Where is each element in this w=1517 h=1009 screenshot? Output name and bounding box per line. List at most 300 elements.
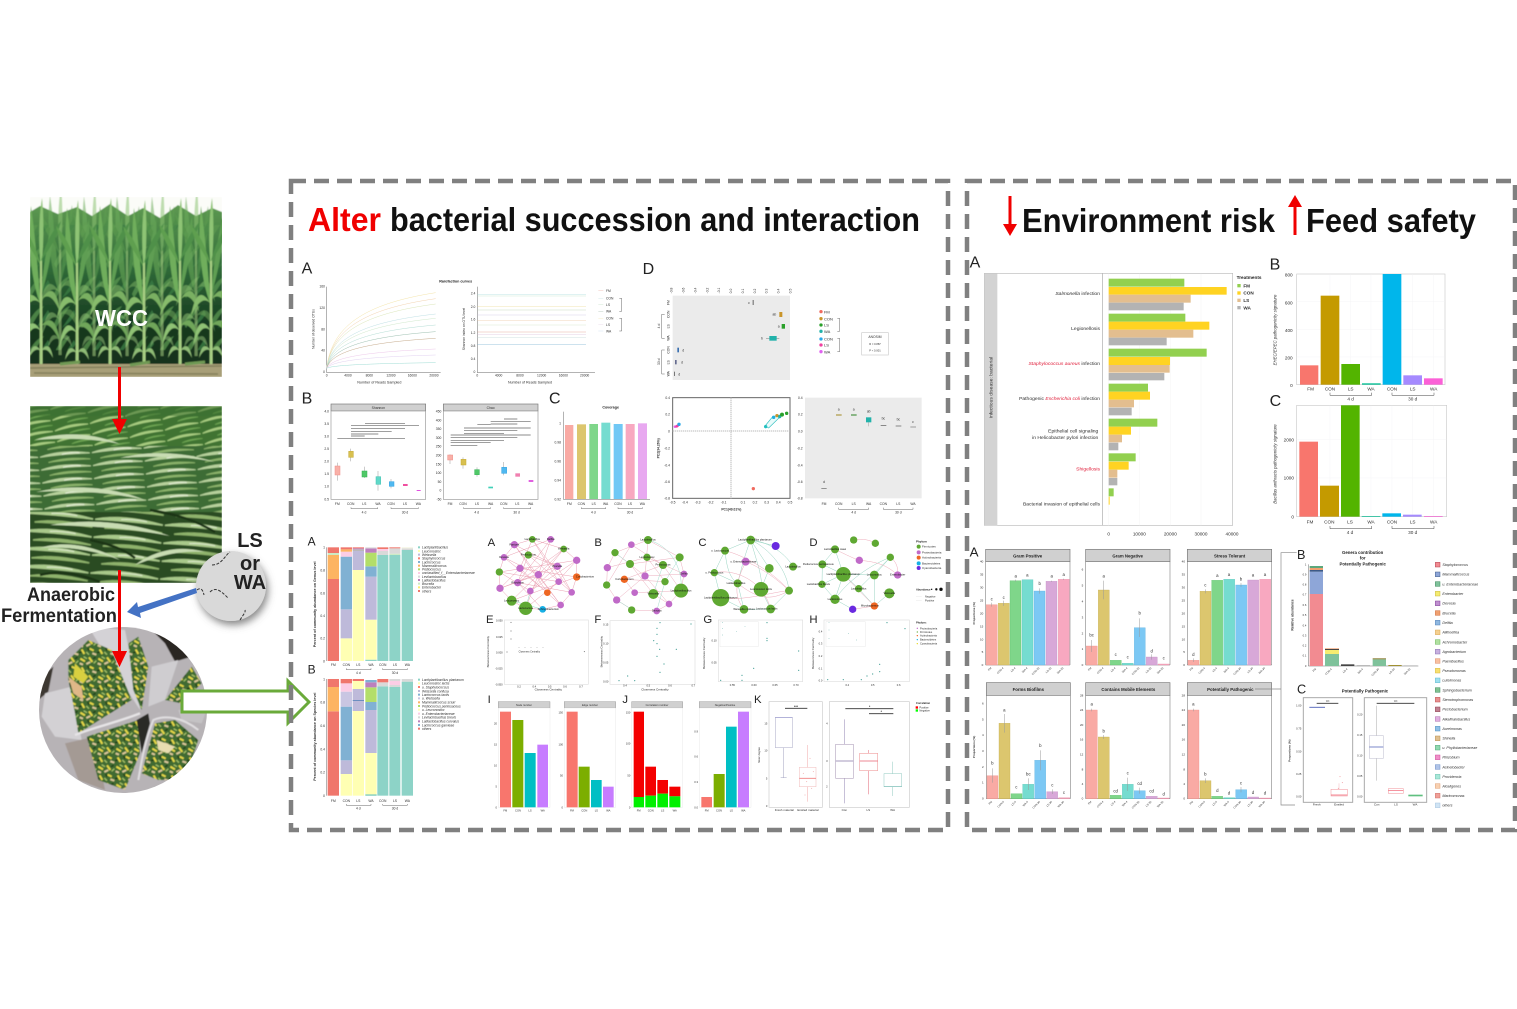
chart: rarefaction curves Shannon: 12000 <box>537 374 546 378</box>
chart: Node number bars <box>494 702 550 813</box>
chart: Potentially Pathogenic: LS-4 <box>1211 800 1218 807</box>
chart: Negative/Positive: 0.0 <box>694 805 699 809</box>
chart: centrality scatter H: 0.3 <box>819 642 823 646</box>
chart: infectious disease bars: 10000 <box>1133 531 1146 536</box>
chart: Correlation number: LS <box>661 809 665 813</box>
chart: PC1 boxplot horizontal: b <box>761 337 763 341</box>
chart: PC1 boxplot horizontal: 0.5 <box>788 289 792 293</box>
chart: centrality scatter H: 0.6 <box>897 683 901 687</box>
chart: PC1 boxplot horizontal <box>657 287 792 380</box>
title: up arrow <box>1288 195 1302 235</box>
chart: Stress Tolerant: 35 <box>1182 573 1185 577</box>
chart: PCoA scatter: -0.4 <box>664 463 670 467</box>
chart: rarefaction curves OTUs <box>311 285 441 385</box>
chart: centrality scatter G: 0.60 <box>751 683 757 687</box>
label: Anaerobic Fermentation: Fermentation <box>1 606 117 627</box>
chart: Potentially Pathogenic: CON-30 <box>1232 800 1242 810</box>
chart: Bacillus anthracis bars: CON <box>1324 520 1335 525</box>
chart: Gram Negative: d <box>1150 648 1153 653</box>
legend: species: Latilactobacillus curvatus <box>422 720 459 724</box>
chart: Mean degree fresh vs ensiled: Fresh material <box>775 808 794 812</box>
chart: Contains Mobile Elements: CON-30 <box>1131 800 1141 810</box>
chart: Stress Tolerant: LS-30 <box>1246 666 1254 674</box>
chart: stacked species level: LS <box>356 799 361 803</box>
chart: Forms Biofilms: Proportions (%) <box>972 736 976 758</box>
chart: EHEC/EPEC bars: EHEC/EPEC pathogenicity signature <box>1272 294 1277 365</box>
letter H: H <box>809 614 818 626</box>
chart: EHEC/EPEC bars <box>1272 273 1445 402</box>
chart: PCoA scatter <box>656 396 792 511</box>
chart: rarefaction curves OTUs: 40 <box>321 349 325 353</box>
chart: pathogenic Con LS WA box: 0.15 <box>1357 733 1363 737</box>
chart: PC1 boxplot horizontal: ab <box>772 313 776 317</box>
chart: PC1 boxplot horizontal: WA <box>666 335 670 341</box>
chart: stacked genus level: LS <box>356 663 361 667</box>
chart: Stress Tolerant: WA-4 <box>1223 666 1230 674</box>
chart: Gram Positive: 20 <box>980 611 984 615</box>
chart: Gram Positive: 5 <box>982 650 984 654</box>
letter C: C <box>549 390 561 407</box>
chart: Chao boxplot: CON <box>459 502 467 506</box>
panel: environment risk and feed safety <box>967 181 1515 830</box>
chart: Mean degree Con LS WA: * <box>881 710 883 714</box>
chart: Contains Mobile Elements: a <box>1090 702 1093 707</box>
legend: genera: others <box>1442 804 1453 808</box>
chart: PC1 boxplot horizontal: d <box>682 348 684 352</box>
chart: Negative/Positive: WA <box>741 809 746 813</box>
chart: PC2 boxplot: LS <box>852 502 856 506</box>
chart: stacked genus level: FM <box>331 663 336 667</box>
chart: Gram Negative: 3 <box>1082 615 1084 619</box>
chart: Shannon boxplot: FM <box>335 502 340 506</box>
chart: Contains Mobile Elements: WA-4 <box>1121 800 1129 807</box>
chart: PC1 boxplot horizontal: -0.1 <box>717 287 721 293</box>
chart: EHEC/EPEC bars: WA <box>1367 386 1376 391</box>
chart: network A: Pediococcus <box>521 553 537 557</box>
chart: Edge number bars: CON <box>581 809 587 813</box>
legend: genus <box>418 546 475 593</box>
chart: Bacillus anthracis bars: 0 <box>1291 514 1294 519</box>
chart: Forms Biofilms: 3 <box>982 749 984 753</box>
chart: PC1 boxplot horizontal: 0.1 <box>741 289 745 293</box>
chart: network A: Brucella <box>553 564 563 568</box>
chart: pathogenic Con LS WA box: 0.20 <box>1357 713 1363 717</box>
chart: PCoA scatter: -0.4 <box>682 500 688 504</box>
chart: Mean degree Con LS WA: LS <box>867 808 870 812</box>
legend: genera: Luteimonas <box>1442 679 1461 683</box>
chart: network D: Lactobacillus <box>851 586 867 590</box>
chart: centrality scatter H <box>811 620 909 687</box>
chart: PCoA scatter: 0.4 <box>665 396 670 400</box>
chart: Gram Negative: a <box>1102 573 1105 578</box>
chart: Potentially Pathogenic: d <box>1228 791 1231 796</box>
legend: rarefaction: LS <box>606 323 611 327</box>
left workflow column <box>1 187 309 796</box>
chart title: Potentially Pathogenic: Potentially Pathogenic <box>1342 689 1389 694</box>
chart: PCoA scatter: -0.1 <box>721 500 727 504</box>
chart: Stress Tolerant: 5 <box>1183 650 1185 654</box>
chart: stacked genus level: 30 d <box>392 671 398 675</box>
chart: PC1 boxplot horizontal: 0.0 <box>729 289 733 293</box>
chart: network A: Devosia <box>499 555 509 559</box>
chart: centrality scatter F: 0.6 <box>668 684 672 688</box>
chart: Chao boxplot: 150 <box>436 462 441 466</box>
chart: pathogenic Con LS WA box: Con <box>1374 803 1380 807</box>
chart: rarefaction curves Shannon: Number of Reads Sampled <box>508 381 552 385</box>
chart: stacked species level <box>313 677 413 810</box>
chart: Contains Mobile Elements: cd <box>1149 788 1155 793</box>
chart: Coverage bars: 4 d <box>591 511 596 515</box>
chart: infectious disease bars: in Helicobacter pylori infection <box>1032 435 1099 441</box>
chart: stacked genus level: 0.2 <box>320 637 325 641</box>
chart: genera stacked bars: WA-4 <box>1357 667 1364 675</box>
chart: Forms Biofilms: 2 <box>982 765 984 769</box>
chart: Edge number bars: 0 <box>562 805 564 809</box>
chart: Gram Positive: a <box>1062 572 1065 577</box>
legend: genus: Latilactobacillus <box>422 578 446 582</box>
chart: Shannon boxplot: WA <box>375 502 381 506</box>
chart: Contains Mobile Elements: cd <box>1113 789 1119 794</box>
chart: Chao boxplot: LS <box>515 502 520 506</box>
chart: Shannon boxplot: 30 d <box>402 511 408 515</box>
chart: Stress Tolerant: d <box>1192 652 1195 657</box>
chart: Stress Tolerant: 15 <box>1182 624 1185 628</box>
chart: Gram Positive <box>972 549 1070 676</box>
legend: genera: Marinomonas <box>1442 794 1465 798</box>
title: Alter bacterial succession and interaction: bacterial succession and interaction <box>390 201 920 238</box>
legend: Treatments: WA <box>1243 305 1251 310</box>
chart: Gram Negative: CON-30 <box>1131 666 1141 676</box>
chart: rarefaction curves OTUs: 0 <box>323 370 325 374</box>
chart: Chao boxplot: 4 d <box>474 511 479 515</box>
chart: Shannon boxplot: CON <box>347 502 355 506</box>
chart: network C <box>704 536 801 614</box>
legend: rarefaction <box>598 289 622 333</box>
legend: genus: Lactiplantibacillus <box>422 546 448 550</box>
legend: Phylum network: Proteobacteria <box>922 550 942 554</box>
legend: genera: u. Phyllobacteriaceae <box>1442 746 1477 750</box>
title: Feed safety: Feed safety <box>1306 202 1477 239</box>
chart: Gram Positive: 0 <box>982 663 984 667</box>
chart: Chao boxplot: 400 <box>436 418 441 422</box>
chart: Coverage bars: CON <box>578 502 586 506</box>
chart: PC1 boxplot horizontal: d <box>681 361 683 365</box>
chart: Gram Positive: a <box>1050 574 1053 579</box>
letter I: I <box>488 694 491 706</box>
chart: PCoA scatter: 0.2 <box>665 413 670 417</box>
chart: network B: Curtobacterium <box>615 577 634 581</box>
chart: Chao boxplot: 300 <box>436 436 441 440</box>
chart: Gram Positive: a <box>1026 572 1029 577</box>
legend: genera: Aliihoeflea <box>1441 631 1459 635</box>
chart: Coverage bars <box>555 406 650 515</box>
title: Alter bacterial succession and interaction: Alter <box>308 201 381 238</box>
chart: Mean degree fresh vs ensiled: 0 <box>766 804 768 808</box>
chart: PC2 boxplot: -0.6 <box>797 480 803 484</box>
chart: rarefaction curves OTUs: 0 <box>326 374 328 378</box>
chart: Contains Mobile Elements: LS-4 <box>1110 800 1117 807</box>
chart: Bacillus anthracis bars: FM <box>1307 520 1313 525</box>
chart: Chao boxplot <box>436 404 538 515</box>
chart: Forms Biofilms: bc <box>1026 771 1031 776</box>
chart: Gram Negative: 6 <box>1082 568 1084 572</box>
chart: Stress Tolerant: 0 <box>1183 663 1185 667</box>
chart: pathogenic fresh vs ensiled box: 0.25 <box>1296 772 1302 776</box>
chart: infectious disease bars: Infectious disease: bacterial <box>988 357 994 418</box>
chart: Potentially Pathogenic: 8 <box>1183 767 1185 771</box>
chart: network C: Weissella confusa <box>733 607 755 611</box>
chart: PC1 boxplot horizontal: -0.6 <box>681 287 685 293</box>
legend: genera: Pseudomonas <box>1442 669 1466 673</box>
chart: genera stacked bars: 0.6 <box>1303 603 1307 607</box>
chart: stacked species level: 30 d <box>392 806 398 810</box>
chart: Coverage bars: CON <box>614 502 622 506</box>
legend: Phylum scatter: Firmicutes <box>920 630 933 634</box>
chart: centrality scatter F: 0.7 <box>691 684 696 688</box>
chart: stacked species level: WA <box>405 799 411 803</box>
chart: Shannon boxplot: WA <box>416 502 422 506</box>
chart: stacked genus level: 0.8 <box>320 569 325 573</box>
chart: centrality scatter F: 0.05 <box>603 660 609 664</box>
chart: PC2 boxplot: -0.4 <box>797 463 803 467</box>
legend: Correlation <box>916 701 931 713</box>
chart: Gram Negative: b <box>1138 611 1141 616</box>
chart: Bacillus anthracis bars: LS <box>1410 520 1416 525</box>
chart: pathogenic fresh vs ensiled box: Fresh <box>1313 803 1321 807</box>
chart: Gram Positive: LS-30 <box>1045 666 1053 674</box>
chart: PC1 boxplot horizontal: d <box>678 372 680 376</box>
chart: Chao boxplot: -50 <box>437 497 441 501</box>
photo: lodged corn leaves <box>30 406 222 583</box>
legend: species: Leuconostoc lactis <box>422 682 450 686</box>
chart: Stress Tolerant: 40 <box>1182 560 1185 564</box>
legend: genera: Shinella <box>1442 737 1455 741</box>
chart: Node number bars: LS <box>528 809 532 813</box>
chart: Stress Tolerant: CON-30 <box>1232 666 1242 676</box>
legend: genus: Lactococcus <box>422 560 441 564</box>
chart: Bacillus anthracis bars: 1000 <box>1284 476 1294 481</box>
legend: Treatments: FM <box>1243 283 1250 288</box>
chart: Gram Positive: 15 <box>980 624 984 628</box>
chart: centrality scatter E: -0.050 <box>495 683 503 687</box>
legend: genus: Levilactobacillus <box>422 575 447 579</box>
chart: stacked genus level: 0.6 <box>320 591 325 595</box>
chart: Forms Biofilms: 4 <box>982 733 984 737</box>
chart: genera stacked bars: 0.9 <box>1303 572 1307 576</box>
chart: Correlation number: FM <box>637 809 641 813</box>
chart: stacked species level: 0.4 <box>320 747 325 751</box>
chart title: Genera contribution: Potentially Pathogenic <box>1339 561 1386 566</box>
chart: PCoA scatter: PC2(34.26%) <box>656 438 660 458</box>
arrow: green hollow <box>182 681 309 723</box>
label: LS or WA <box>234 530 266 594</box>
chart: EHEC/EPEC bars: CON <box>1325 386 1335 391</box>
legend: genera: Agrobacterium <box>1441 650 1466 654</box>
legend: PCoA groups <box>819 309 840 354</box>
chart: rarefaction curves Shannon: 0 <box>476 374 478 378</box>
chart: centrality scatter H: 0.4 <box>819 629 823 633</box>
chart: network C: Lactococcus lactis <box>756 607 778 611</box>
chart: PCoA scatter: -0.2 <box>664 446 670 450</box>
chart: Bacillus anthracis bars: CON <box>1387 520 1397 525</box>
chart: stacked species level: WA <box>368 799 374 803</box>
chart: Forms Biofilms: 0 <box>982 797 984 801</box>
chart: network A: Pantoea <box>509 542 520 546</box>
chart: Negative/Positive: 0.6 <box>694 755 699 759</box>
chart: Gram Positive: 30 <box>980 586 984 590</box>
chart: Stress Tolerant: LS-4 <box>1211 666 1218 673</box>
chart: Forms Biofilms: a <box>1003 707 1006 712</box>
legend: species: Levilactobacillus brevis <box>422 716 456 720</box>
chart: Coverage bars: WA <box>603 502 609 506</box>
chart: PCoA scatter: -0.3 <box>695 500 701 504</box>
bracket: connector to panels B and C <box>1255 553 1297 805</box>
legend: Treatments: CON <box>1243 291 1254 296</box>
chart: network B: Leuconostoc <box>639 555 655 559</box>
legend: genus: Mammaliicoccus <box>422 564 447 568</box>
chart: Mean degree Con LS WA: Con <box>842 808 847 812</box>
chart: stacked species level: 0.6 <box>320 724 325 728</box>
chart: Gram Negative: 4 <box>1082 599 1084 603</box>
chart: EHEC/EPEC bars: CON <box>1387 386 1397 391</box>
chart: rarefaction curves OTUs: 20000 <box>429 374 439 378</box>
chart: pathogenic Con LS WA box: 0.10 <box>1357 754 1363 758</box>
legend: PCoA groups: WA <box>824 329 831 334</box>
chart: Gram Negative: c <box>1163 655 1166 660</box>
chart: pathogenic Con LS WA box <box>1357 698 1427 807</box>
chart: Coverage bars: 0.96 <box>555 460 561 464</box>
chart: network A: Delftia <box>547 537 555 541</box>
chart: EHEC/EPEC bars: 30 d <box>1408 397 1418 402</box>
legend: genus: others <box>422 589 432 593</box>
chart: EHEC/EPEC bars: 0 <box>1290 383 1293 388</box>
chart: genera stacked bars <box>1290 562 1418 677</box>
chart: Correlation number: 100 <box>626 742 631 746</box>
chart: Node number bars: 5 <box>496 785 498 789</box>
chart: Edge number bars <box>559 702 616 813</box>
chart: network C: Lactiplantibacillus plantarum <box>704 595 738 599</box>
chart: Correlation number: 150 <box>626 711 631 715</box>
chart: Stress Tolerant: c <box>1204 583 1207 588</box>
letter network D: D <box>809 537 818 549</box>
legend: species: u. Weissella <box>422 697 440 701</box>
chart: Forms Biofilms: 6 <box>982 701 984 705</box>
title: Environment risk: Environment risk <box>1022 202 1276 239</box>
chart: Node number bars: WA <box>541 809 545 813</box>
chart: stacked species level: CON <box>379 799 387 803</box>
chart: PC2 boxplot: CON <box>835 502 843 506</box>
chart: Correlation number <box>626 702 683 813</box>
chart: Coverage bars: 0.94 <box>555 478 561 482</box>
chart: pathogenic fresh vs ensiled box: Proportions (%) <box>1288 739 1292 762</box>
chart: Potentially Pathogenic: WA-30 <box>1258 800 1266 808</box>
chart: Forms Biofilms: b <box>991 761 994 766</box>
chart: infectious disease bars: 20000 <box>1164 531 1177 536</box>
chart: Chao boxplot: 100 <box>436 471 441 475</box>
chart: Node number bars: 15 <box>494 743 498 747</box>
chart: Potentially Pathogenic: 20 <box>1182 723 1185 727</box>
chart: Contains Mobile Elements: 12 <box>1080 752 1084 756</box>
legend: rarefaction: WA <box>606 310 612 314</box>
chart: PC1 boxplot horizontal: c <box>748 301 750 305</box>
legend: genera: Providencia <box>1442 775 1461 779</box>
chart: Bacillus anthracis bars: 30 d <box>1408 530 1418 535</box>
chart: centrality scatter H: 0.2 <box>819 654 823 658</box>
chart: PC2 boxplot: -0.2 <box>797 446 803 450</box>
chart: pathogenic Con LS WA box: 0.05 <box>1357 774 1363 778</box>
chart: Contains Mobile Elements: 20 <box>1080 723 1084 727</box>
chart: centrality scatter E: Closeness Centrality <box>535 687 563 691</box>
chart: PC1 boxplot horizontal: WA <box>666 370 670 376</box>
chart: Edge number bars: 100 <box>559 742 564 746</box>
chart: Mean degree fresh vs ensiled: 5 <box>766 776 768 780</box>
chart: Chao boxplot: FM <box>448 502 453 506</box>
chart: stacked species level: FM <box>331 799 336 803</box>
chart: Shannon boxplot: 2.0 <box>324 460 329 464</box>
chart: network D: Lactobacillus casei <box>824 547 847 551</box>
chart: Bacillus anthracis bars <box>1272 405 1447 535</box>
legend: genera <box>1435 562 1478 808</box>
legend: genus: Staphylococcus <box>422 557 446 561</box>
chart: PCoA scatter: PC1(49.01%) <box>721 507 741 511</box>
legend: species: Mammaliicoccus sciuri <box>422 701 456 705</box>
chart: genera stacked bars: Relative abundance <box>1290 599 1294 631</box>
label: WCC: WCC <box>95 305 148 331</box>
letter A: A <box>970 254 981 271</box>
chart: Contains Mobile Elements: 4 <box>1082 782 1084 786</box>
chart: PC1 boxplot horizontal: -0.4 <box>693 287 697 293</box>
chart: network B: Lactobacillus <box>640 538 656 542</box>
chart: network D: Enterobacter <box>890 573 905 577</box>
chart: PC1 boxplot horizontal: 4 d <box>657 324 661 328</box>
scatter E: E <box>486 614 494 626</box>
chart: centrality scatter F: 0.4 <box>623 684 627 688</box>
legend: rarefaction: CON <box>606 297 614 301</box>
chart: stacked species level: LS <box>393 799 398 803</box>
chart: rarefaction curves OTUs: 8000 <box>366 374 373 378</box>
chart: Gram Negative <box>1082 549 1170 676</box>
chart: centrality scatter E: 0.5 <box>548 684 552 688</box>
chart: genera stacked bars: 0.2 <box>1303 644 1307 648</box>
chart: network C: u. Enterobacteriaceae <box>730 559 757 563</box>
chart: PCoA scatter: 0.2 <box>753 500 757 504</box>
chart: Shannon boxplot: Shannon <box>372 406 385 410</box>
chart: PC2 boxplot: FM <box>822 502 827 506</box>
chart: network C: Lactobacillus <box>785 564 801 568</box>
chart: PC2 boxplot: c <box>912 420 914 424</box>
chart: infectious disease bars: 40000 <box>1226 531 1239 536</box>
chart: Forms Biofilms <box>972 683 1070 810</box>
legend: genera: Alcaligenes <box>1441 784 1461 788</box>
chart: PC2 boxplot: bc <box>882 416 885 420</box>
chart: centrality scatter E: Closeness Centrality <box>519 650 541 653</box>
chart: Contains Mobile Elements: 24 <box>1080 708 1084 712</box>
chart: pathogenic Con LS WA box: *** <box>1394 699 1398 703</box>
chart: network C: Latilactobacillus <box>727 581 746 585</box>
callout: ANOSIM <box>862 333 888 355</box>
chart: Coverage bars: 0.98 <box>555 441 561 445</box>
chart: stacked genus level <box>313 546 413 675</box>
chart: stacked species level: 0.2 <box>320 771 325 775</box>
chart: Negative/Positive: Negative/Positive <box>715 703 736 707</box>
chart: network D <box>803 536 905 613</box>
chart: Contains Mobile Elements: WA-30 <box>1156 800 1165 808</box>
chart: centrality scatter G <box>702 620 803 687</box>
chart: Mean degree fresh vs ensiled: 10 <box>764 749 768 753</box>
chart: Coverage bars: 0.92 <box>555 497 561 501</box>
letter A functional: A <box>970 545 979 560</box>
chart: Node number bars: 20 <box>494 722 498 726</box>
